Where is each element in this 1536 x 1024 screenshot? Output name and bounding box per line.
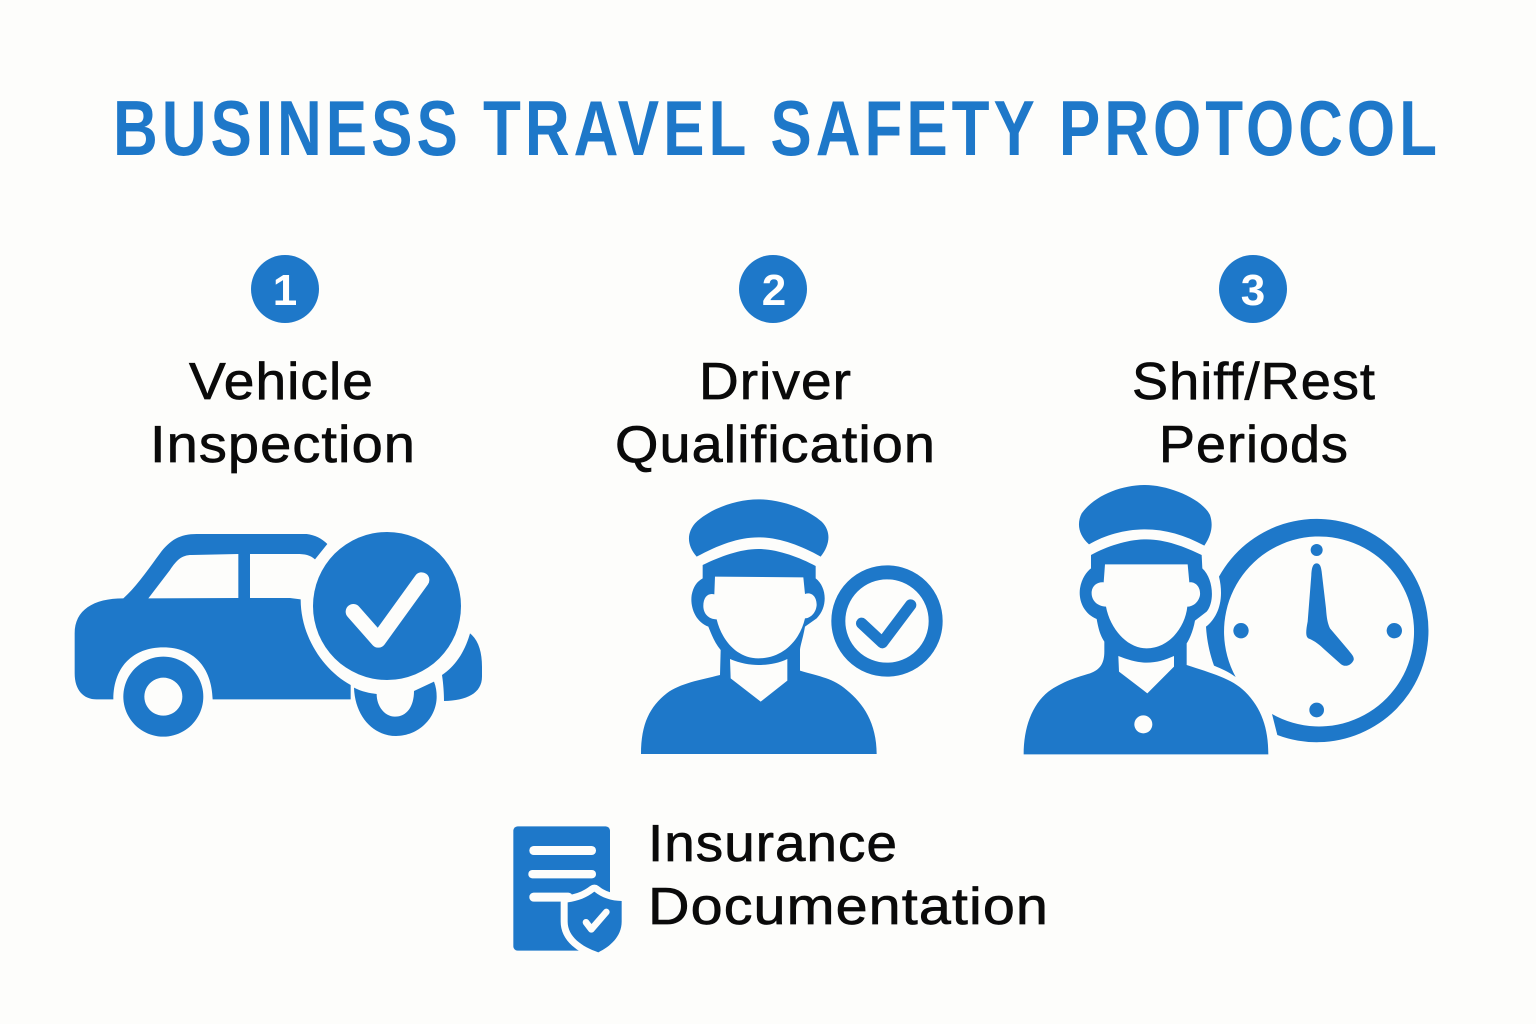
heading: shift rest periods: Periods xyxy=(1159,416,1349,474)
icon: driver with clock xyxy=(1024,485,1428,754)
panel: step 1 vehicle inspection xyxy=(75,255,482,737)
number badge 1 xyxy=(251,255,319,323)
text: insurance documentation: Documentation xyxy=(648,878,1049,936)
heading: shift rest periods xyxy=(1132,353,1376,474)
icon: car with check mark xyxy=(75,532,482,737)
number badge 2 xyxy=(739,255,807,323)
icon: driver with check badge xyxy=(641,499,936,754)
panel: step 2 driver qualification xyxy=(615,255,936,754)
number badge 3: 3 xyxy=(1241,266,1265,315)
panel: step 3 shift and rest periods xyxy=(1024,255,1428,754)
number badge 1: 1 xyxy=(273,266,297,315)
panel: insurance documentation xyxy=(513,815,1049,952)
text: insurance documentation xyxy=(648,815,1049,936)
number badge 3 xyxy=(1219,255,1287,323)
text: insurance documentation: Insurance xyxy=(648,815,898,873)
icon: document with shield xyxy=(513,826,622,952)
heading: vehicle inspection: Inspection xyxy=(150,416,416,474)
heading: driver qualification: Qualification xyxy=(615,416,936,474)
heading: driver qualification: Driver xyxy=(699,353,852,411)
number badge 2: 2 xyxy=(762,266,786,315)
heading: shift rest periods: Shiff/Rest xyxy=(1132,353,1376,411)
heading: vehicle inspection xyxy=(150,353,416,474)
heading: driver qualification xyxy=(615,353,936,474)
heading: vehicle inspection: Vehicle xyxy=(189,353,374,411)
